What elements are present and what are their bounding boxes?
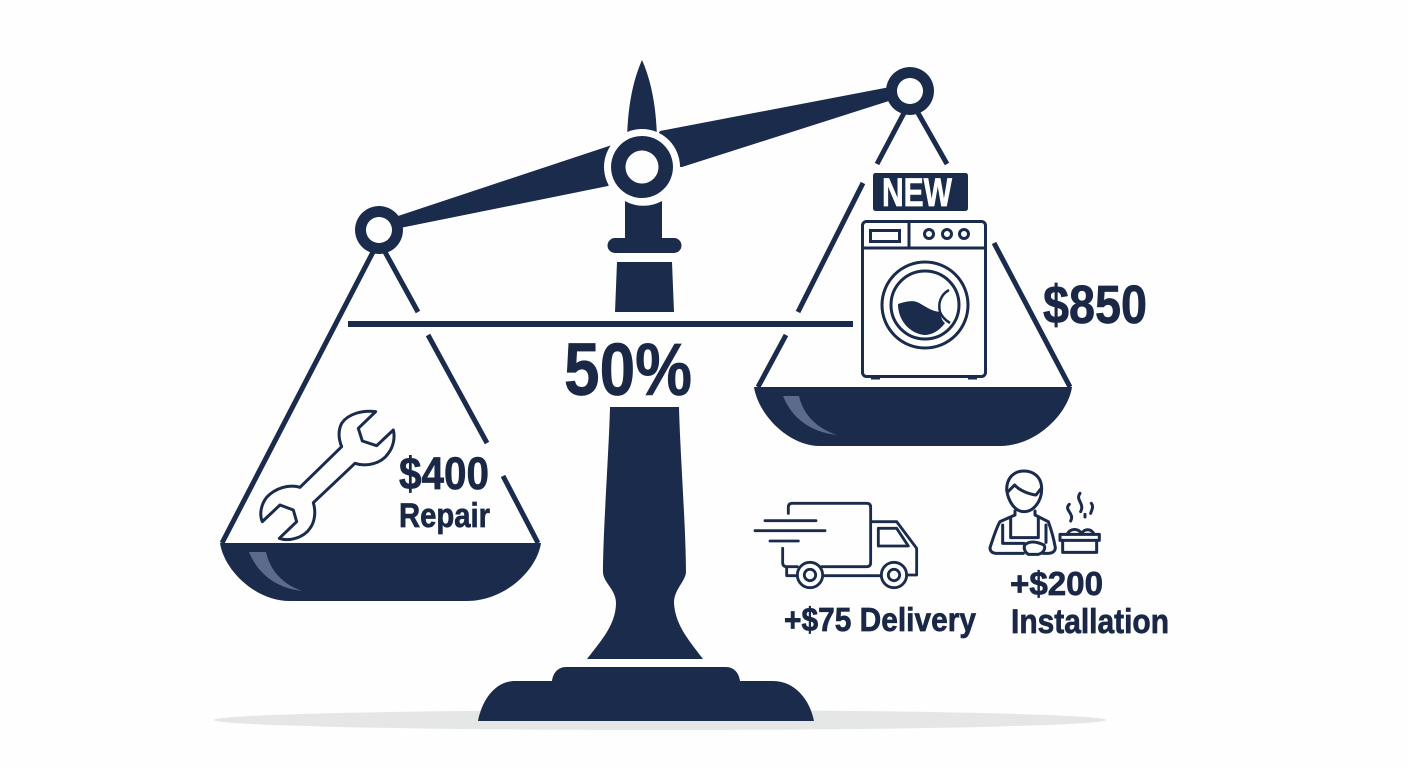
icon: wrench: [261, 411, 394, 540]
right pivot ring: [886, 67, 934, 115]
left bowl highlight: [249, 552, 302, 591]
upper column: [608, 201, 681, 253]
icon: delivery truck: [755, 503, 917, 588]
scale stand and beam: [392, 60, 892, 721]
icon: washing machine: [862, 222, 986, 378]
central hub: [611, 136, 673, 198]
hub halo: [604, 129, 680, 205]
new machine price: $850: [1043, 275, 1147, 335]
repair label: Repair: [399, 497, 490, 535]
installation price: +$200: [1010, 565, 1103, 602]
right beam arm: [640, 87, 892, 167]
repair price: $400: [399, 448, 489, 499]
percentage label: 50%: [564, 328, 692, 411]
left pan chains: [222, 252, 538, 543]
installation label: Installation: [1011, 603, 1169, 641]
right bowl: [754, 387, 1072, 446]
horizontal reference line: [348, 321, 853, 327]
base: [478, 667, 814, 721]
right pan chains: [758, 113, 1070, 387]
left beam arm: [392, 145, 640, 228]
NEW badge: NEW: [882, 171, 952, 215]
spire: [627, 60, 657, 145]
ground shadow: [214, 710, 1106, 730]
lower column: [587, 407, 703, 659]
left pan: repair: [220, 206, 541, 601]
right pan: new machine: [754, 67, 1147, 446]
delivery label: +$75 Delivery: [784, 601, 977, 638]
icon: installer with parts tub: [990, 471, 1099, 554]
left bowl: [220, 543, 541, 601]
left pivot ring: [355, 206, 403, 254]
right bowl highlight: [783, 396, 837, 435]
column collar: [615, 262, 674, 312]
